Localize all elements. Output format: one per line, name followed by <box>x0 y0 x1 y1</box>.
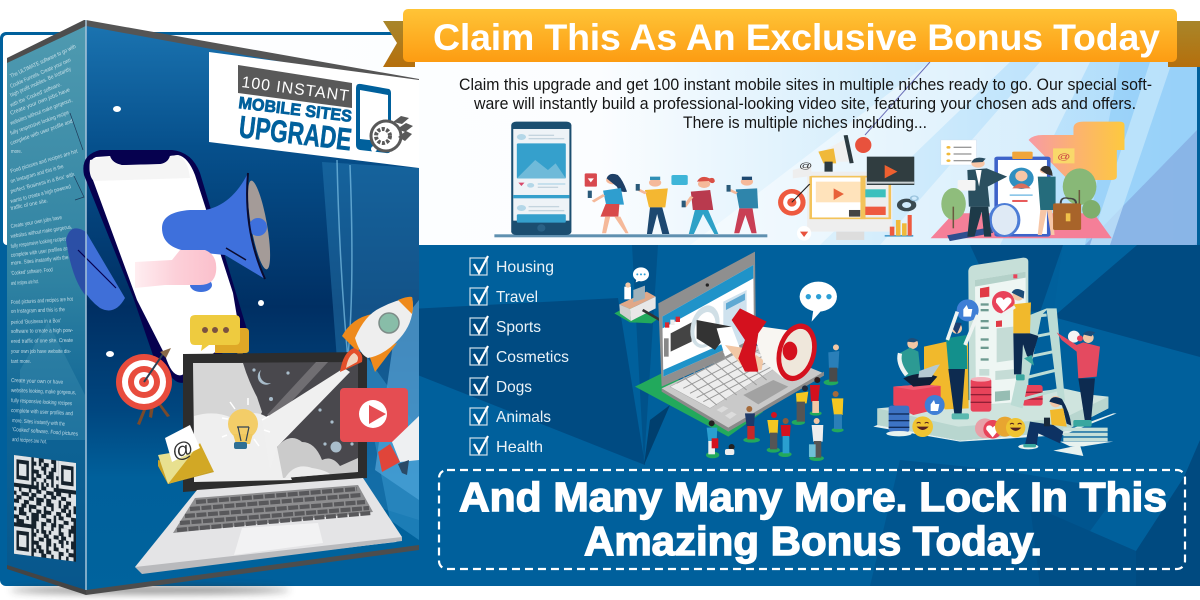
laptop screen <box>183 352 367 492</box>
icon: smartphone feed <box>511 122 571 235</box>
illustration: isometric laptop with megaphone <box>614 252 844 461</box>
magnifier <box>990 204 1019 236</box>
heart tag <box>585 173 597 187</box>
green mat <box>635 373 763 437</box>
QR code <box>14 455 76 562</box>
background blob <box>1029 122 1124 180</box>
intro paragraph: There is multiple niches including... <box>683 113 927 132</box>
spine faint triangle <box>20 322 85 440</box>
giant phone <box>968 258 1028 406</box>
megaphone <box>818 140 854 162</box>
front light rays <box>322 160 419 540</box>
seated man with laptop <box>899 338 940 387</box>
man with megaphone <box>1057 331 1100 427</box>
target <box>778 189 806 216</box>
spine copy text: and recipes are hot. <box>11 279 39 287</box>
megaphone <box>162 173 275 292</box>
moon and stars <box>258 370 271 385</box>
rocket <box>340 297 413 372</box>
spine copy text: Food pictures and recipes are hot <box>11 297 73 306</box>
laptop screen <box>658 252 756 387</box>
spine copy text: your own job have website dis- <box>11 349 71 355</box>
yellow chat bubble <box>190 315 249 356</box>
spine copy text: software to create a high pow- <box>11 328 73 335</box>
email envelope <box>158 425 214 484</box>
spine copy text: perfect 'Business in a Box' with <box>10 172 75 195</box>
spine copy text: fully responsive looking recipe <box>10 110 70 137</box>
smartphone <box>83 150 248 383</box>
clipboard <box>994 157 1051 237</box>
trees <box>941 188 966 220</box>
spine copy text: wants to create a high powered <box>9 184 72 205</box>
spine copy text: 'Cooked' software. Food <box>11 267 53 277</box>
spine copy text: more. Sites instantly with the <box>12 418 65 428</box>
spine copy text: and recipes are hot. <box>12 437 48 445</box>
item: Animals <box>470 406 551 426</box>
item: Travel <box>470 286 538 306</box>
section: product box <box>7 20 419 595</box>
spine copy text: high profit mobiles. Be instantly <box>9 66 72 99</box>
product label: 100 INSTANT <box>240 74 350 105</box>
man on ladder <box>992 289 1065 408</box>
briefcase <box>1053 203 1081 230</box>
platform <box>877 388 1108 441</box>
red megaphone <box>732 308 823 386</box>
spine copy text: websites looking, make gorgeous, <box>10 388 76 396</box>
note card <box>941 140 977 165</box>
email envelope: @ <box>170 437 196 464</box>
spine copy text: more. Sites instantly with the <box>11 255 69 267</box>
illustration: digital marketing monitor: @ <box>799 161 812 171</box>
spine copy text: 'Cooked' software. Food pictures <box>12 427 78 438</box>
box spine <box>7 26 86 593</box>
keyboard base <box>135 478 402 572</box>
item: Cosmetics: Cosmetics <box>496 349 569 366</box>
spine copy text: Create your own jobs have <box>10 87 71 117</box>
spine copy text: complete with user profiles and <box>11 408 73 417</box>
spine copy text <box>9 44 79 445</box>
illustration: phone and people walking <box>494 122 767 237</box>
database stacks <box>886 377 1043 436</box>
spine copy text: Cookie Funnels. Create your own <box>9 58 72 90</box>
spine copy text: traffic of one site. <box>10 198 49 212</box>
product label <box>209 52 419 168</box>
laptop base <box>662 345 824 430</box>
crowd <box>706 344 844 461</box>
panel: upper white area <box>3 35 1197 245</box>
spine copy text: on Instagram and this is the <box>10 164 64 185</box>
rocket trail <box>262 368 350 470</box>
spine copy text: complete with user profiles and <box>11 246 71 259</box>
target <box>116 348 172 425</box>
illustration: business team profile <box>931 122 1124 238</box>
envelope <box>793 165 811 178</box>
item: Housing: Housing <box>496 259 554 276</box>
gears <box>899 200 914 210</box>
light bulb <box>222 398 270 449</box>
ribbon banner <box>383 9 1200 67</box>
arm through screen <box>686 302 724 351</box>
callout text: And Many Many More. Lock In This <box>459 474 1167 520</box>
checklist <box>470 256 569 456</box>
yellow block <box>924 342 969 409</box>
spine copy text: Food pictures and recipes are hot <box>10 149 79 175</box>
intro paragraph <box>459 75 1152 132</box>
paper stack <box>1063 428 1108 441</box>
item: Animals: Animals <box>496 409 551 426</box>
desk kiosk <box>614 267 660 323</box>
label phone icon <box>356 84 413 153</box>
illustration: business team profile: @ <box>1057 152 1071 162</box>
item: Dogs: Dogs <box>496 379 532 396</box>
callout: dashed box <box>439 470 1185 569</box>
item: Health: Health <box>496 439 543 456</box>
envelope icon <box>1053 148 1074 163</box>
spine copy text: complete with user profile and <box>10 119 74 147</box>
heart badge <box>797 226 811 241</box>
item: Sports: Sports <box>496 319 541 336</box>
spine copy text: tant more. <box>11 359 31 365</box>
spine copy text: The ULTIMATE software to go with <box>9 44 77 80</box>
item: Dogs <box>470 376 532 396</box>
box front <box>86 22 419 592</box>
spine copy text: on Instagram and this is the <box>11 307 65 315</box>
item: Housing <box>470 256 554 276</box>
speech bubble <box>800 282 837 322</box>
spine copy text: period 'Business in a Box' <box>11 318 61 326</box>
night clouds <box>277 438 358 478</box>
item: Sports <box>470 316 541 336</box>
video play card <box>340 388 408 442</box>
person 3 <box>682 177 718 234</box>
spine copy text: Create your own jobs have <box>10 215 63 230</box>
man <box>958 158 1007 237</box>
hand shadow on spine <box>66 228 86 296</box>
white megaphone <box>378 416 419 475</box>
callout text <box>459 474 1167 564</box>
standing man with like <box>946 299 979 419</box>
laptop <box>135 352 402 574</box>
chart bars <box>885 215 913 237</box>
ground <box>931 213 1112 238</box>
red cube <box>893 384 941 415</box>
spine copy text: Create your own or have <box>11 378 63 386</box>
spine copy text: more. <box>11 149 22 155</box>
spine ink lines <box>70 113 84 200</box>
monitor <box>807 172 892 232</box>
product label: MOBILE SITES <box>238 94 353 126</box>
illustration: digital marketing monitor <box>778 135 918 241</box>
spine copy text: with the 'Cooked' software. <box>9 82 63 109</box>
item: Travel: Travel <box>496 289 538 306</box>
item: Health <box>470 436 543 456</box>
spine copy text: fully responsive looking recipes <box>11 398 72 407</box>
woman <box>1038 166 1056 235</box>
person 1 <box>588 174 629 233</box>
person 2 <box>636 177 669 234</box>
spine copy text: fully responsive looking recipes <box>10 236 67 250</box>
label band <box>238 65 352 108</box>
intro paragraph: Claim this upgrade and get 100 instant mobile sites in multiple niches ready to go. Our special soft- <box>459 75 1152 94</box>
hand behind phone <box>66 228 125 310</box>
title: Claim This As An Exclusive Bonus Today <box>433 16 1160 58</box>
white dots <box>113 106 121 112</box>
intro paragraph: ware will instantly build a professional-looking video site, featuring your chosen ads and offers. <box>473 94 1136 113</box>
item: Cosmetics <box>470 346 569 366</box>
video player <box>867 157 914 185</box>
paper plane <box>1053 445 1083 456</box>
box edge highlight <box>85 20 87 590</box>
spine copy text: websites without make gorgeous, <box>9 97 74 127</box>
chat bubble <box>671 175 688 185</box>
spine copy text: websites without make gorgeous, <box>10 224 73 240</box>
box shadow <box>10 586 290 594</box>
reading woman <box>1018 396 1071 449</box>
spine copy text: ered traffic of one site. Create <box>11 338 73 345</box>
emojis and hearts <box>912 395 1025 439</box>
product label: UPGRADE <box>237 109 354 157</box>
pink hand <box>135 250 216 288</box>
person 4 <box>727 177 758 233</box>
illustration: social media team with giant phone <box>873 258 1117 456</box>
callout text: Amazing Bonus Today. <box>584 518 1042 564</box>
panel: lower facets background <box>410 245 1200 586</box>
